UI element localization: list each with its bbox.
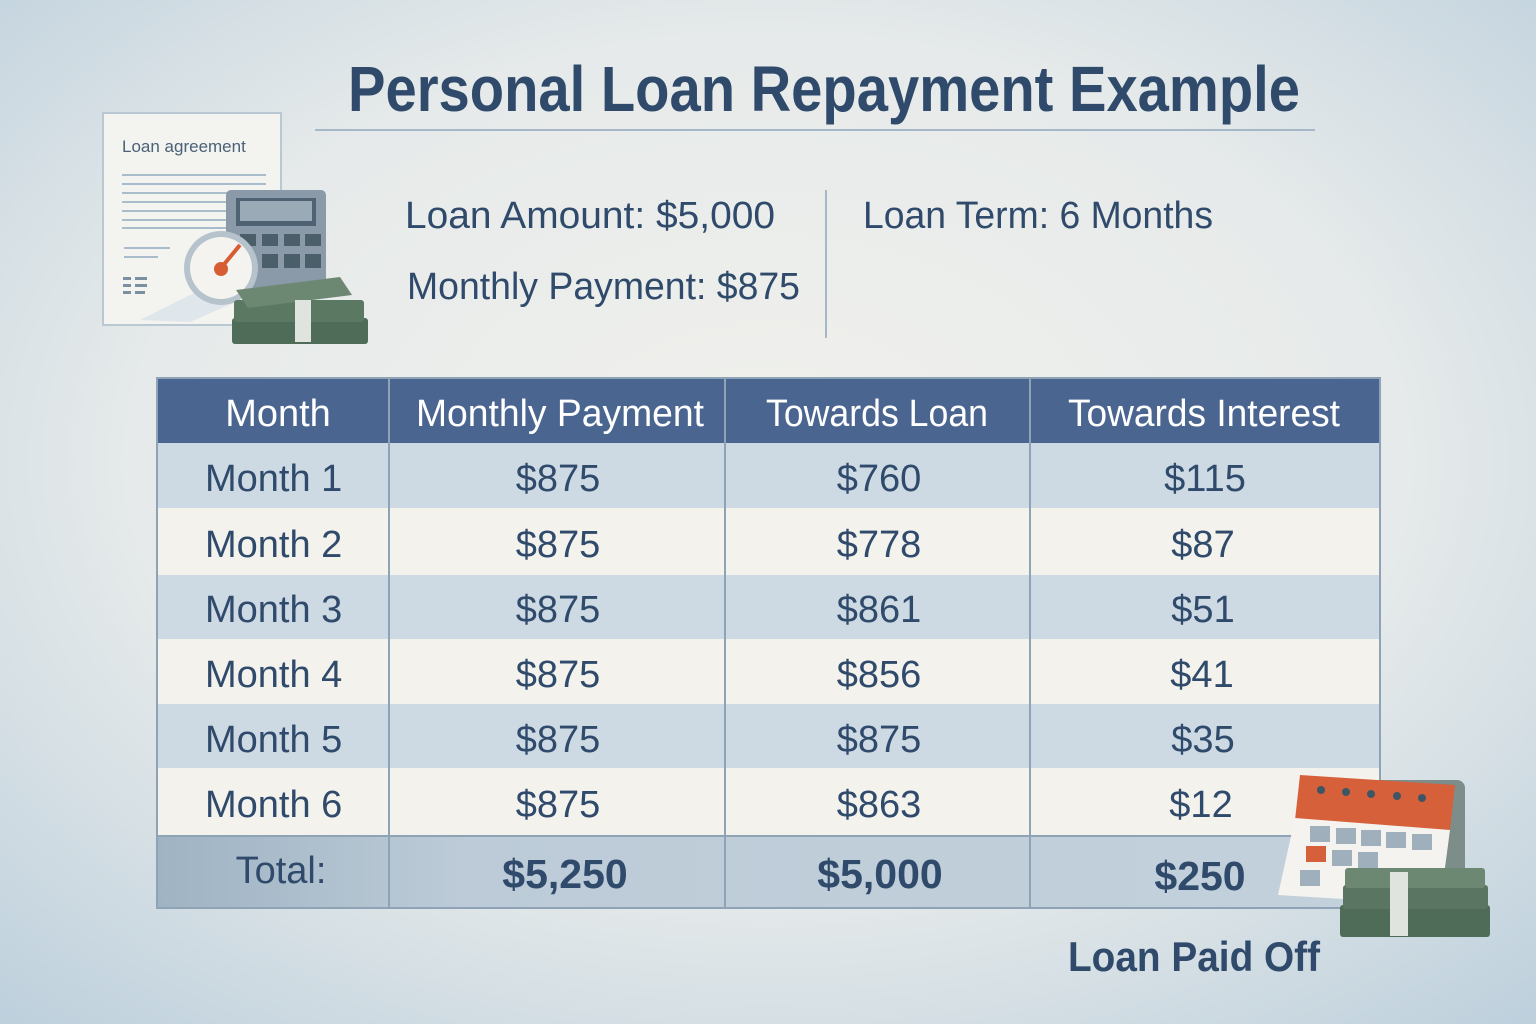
table rows: $12	[1169, 784, 1233, 826]
table rows: $863	[837, 784, 921, 826]
icon: calendar with money stack	[1278, 775, 1490, 937]
label: loan paid off: Loan Paid Off	[1068, 933, 1321, 980]
table rows: $875	[516, 589, 600, 631]
table rows: $35	[1171, 719, 1235, 761]
table rows: $875	[516, 719, 600, 761]
table rows: $856	[837, 654, 921, 696]
table rows: Month 1	[205, 458, 342, 500]
table header	[157, 378, 1380, 443]
icon: loan agreement document with calculator, clock and money: Loan agreement	[122, 137, 246, 156]
table header: Monthly Payment	[416, 393, 704, 435]
table rows: $875	[837, 719, 921, 761]
icon: loan agreement document with calculator, clock and money	[103, 113, 368, 344]
table rows: $760	[837, 458, 921, 500]
table header: Towards Interest	[1068, 393, 1340, 435]
table: repayment schedule	[157, 378, 1380, 908]
text block: loan amount and monthly payment	[405, 195, 800, 308]
text block: loan term: Loan Term: 6 Months	[863, 195, 1213, 237]
table rows: Month 4	[205, 654, 342, 696]
table header: Month	[225, 393, 331, 435]
table total row: $250	[1154, 853, 1246, 899]
text block: loan amount and monthly payment: Loan Amount: $5,000	[405, 195, 775, 237]
table total row	[157, 836, 1380, 908]
table rows: $861	[837, 589, 921, 631]
table rows: Month 3	[205, 589, 342, 631]
table rows: $51	[1171, 589, 1235, 631]
table total row: $5,000	[817, 851, 943, 897]
table rows: $875	[516, 784, 600, 826]
table total row: $5,250	[502, 851, 628, 897]
text block: loan amount and monthly payment: Monthly Payment: $875	[407, 266, 800, 308]
table rows: $875	[516, 654, 600, 696]
table rows: Month 6	[205, 784, 342, 826]
table rows: $115	[1164, 458, 1246, 500]
table rows: Month 2	[205, 524, 342, 566]
table total row: Total:	[236, 850, 326, 892]
table rows: $778	[837, 524, 921, 566]
table rows: Month 5	[205, 719, 342, 761]
table rows: $87	[1171, 524, 1235, 566]
table rows: $41	[1170, 654, 1234, 696]
table header: Towards Loan	[766, 393, 988, 435]
table rows: $875	[516, 458, 600, 500]
title: Personal Loan Repayment Example	[348, 53, 1300, 125]
table rows	[157, 443, 1380, 836]
table rows: $875	[516, 524, 600, 566]
